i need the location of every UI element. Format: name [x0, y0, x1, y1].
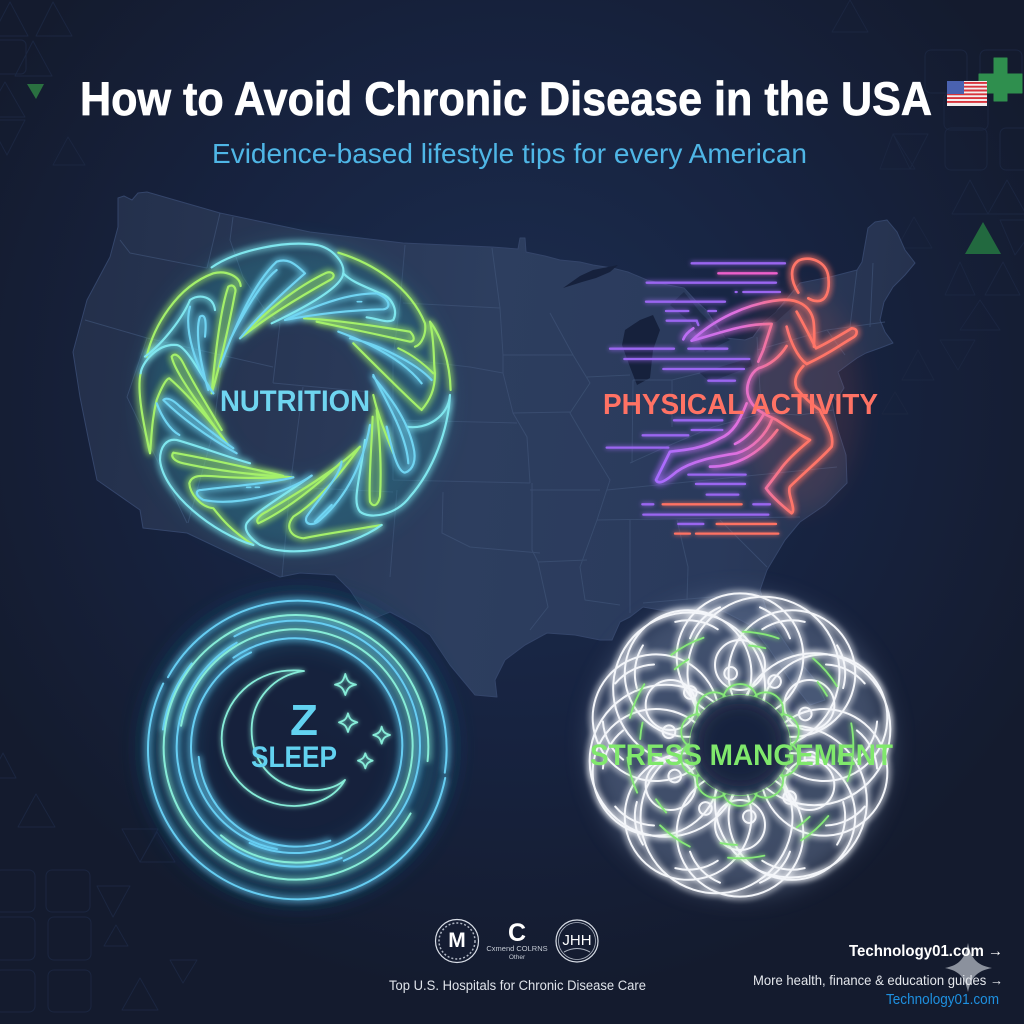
- logo: C mark: C: [508, 919, 526, 947]
- icon: green plus: [979, 58, 1022, 101]
- speed lines: [607, 263, 785, 534]
- stress management label: STRESS MANGEMENT: [590, 739, 893, 772]
- logo: C mark: Other: [509, 954, 526, 961]
- logo: M badge: M: [448, 929, 466, 952]
- link: Technology01.com: Technology01.com →: [849, 943, 1003, 960]
- icon: running figure: [656, 259, 857, 513]
- icon: crescent moon and stars: [222, 670, 390, 806]
- logo: M badge: [436, 920, 478, 962]
- sleep letter Z: Z: [290, 696, 318, 745]
- logo: C mark: Cxmend COLRNS: [486, 944, 548, 953]
- logo: JH badge: JHH: [562, 932, 592, 949]
- panel: sleep: [96, 547, 500, 951]
- icon: grey sparkle: [945, 943, 992, 992]
- sleep label: SLEEP: [251, 741, 337, 774]
- subtitle: Evidence-based lifestyle tips for every American: [212, 138, 807, 169]
- icon: US flag: [947, 81, 987, 106]
- hospitals caption: Top U.S. Hospitals for Chronic Disease Care: [389, 978, 646, 993]
- icon: white rosette: [576, 577, 904, 913]
- map of the United States: [73, 192, 915, 705]
- panel: nutrition: [139, 244, 451, 551]
- icon: green inner ring: [627, 632, 853, 858]
- more guides text: More health, finance & education guides →: [753, 972, 1003, 988]
- nutrition label: NUTRITION: [220, 385, 370, 418]
- physical activity label: PHYSICAL ACTIVITY: [603, 389, 878, 421]
- panel: stress management: [576, 577, 904, 913]
- hospital logos: [436, 919, 598, 962]
- icon: concentric sleep rings: [96, 547, 500, 951]
- nutrition swirl icon: [139, 244, 451, 551]
- title: How to Avoid Chronic Disease in the USA: [80, 72, 932, 125]
- logo: JH badge: [556, 920, 598, 962]
- panel: physical activity: [603, 259, 878, 534]
- icon: green triangle left: [27, 84, 44, 99]
- logo: C mark: [486, 919, 548, 961]
- link: blue Technology01.com: Technology01.com: [886, 992, 999, 1008]
- icon: green triangle right: [965, 222, 1001, 254]
